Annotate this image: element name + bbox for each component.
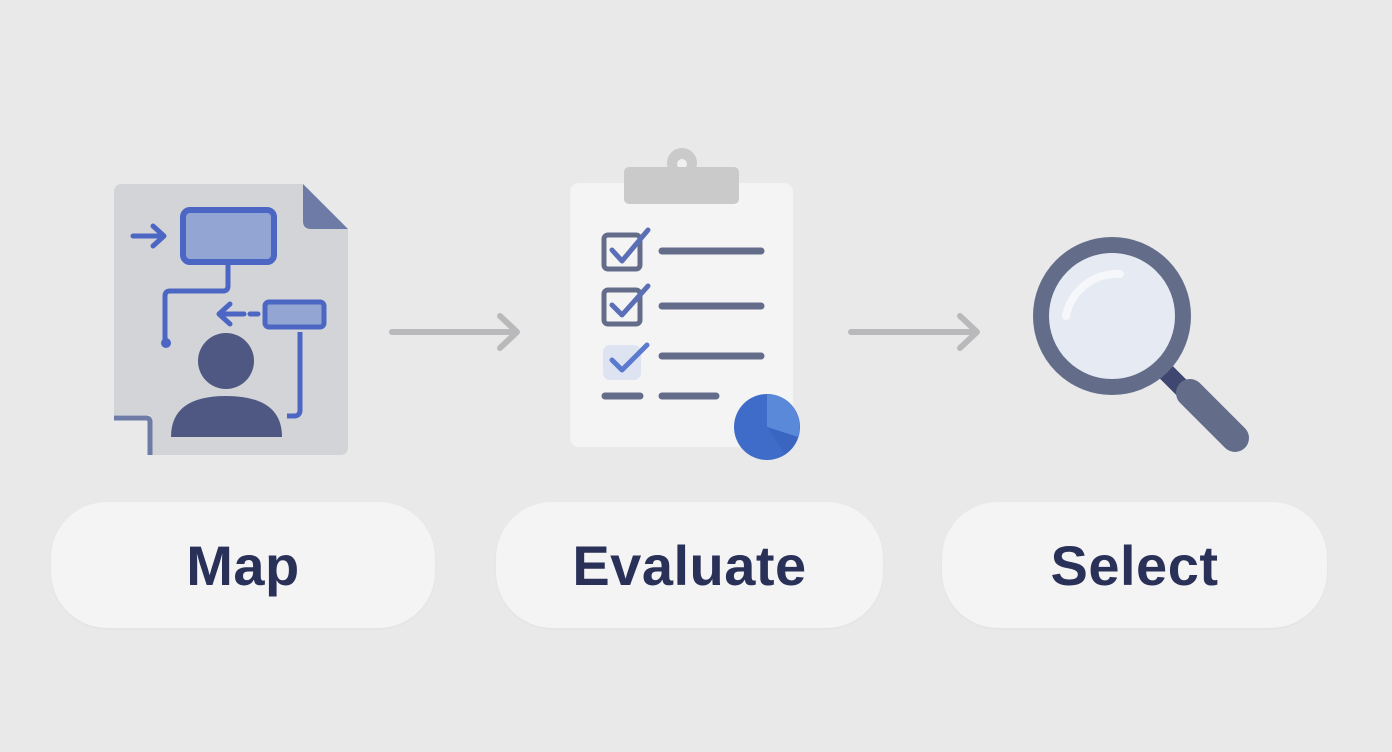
label: Select <box>942 502 1327 628</box>
label: Evaluate <box>496 502 883 628</box>
arrow 1 <box>392 316 517 348</box>
arrow 2 <box>851 316 977 348</box>
label: Select: Select <box>1050 534 1218 596</box>
icon: clipboard checklist <box>570 148 800 460</box>
label: Map <box>51 502 435 628</box>
icon: map document <box>114 184 348 455</box>
label: Evaluate: Evaluate <box>572 534 807 596</box>
icon: magnifying glass <box>1041 245 1235 438</box>
label: Map: Map <box>186 534 300 596</box>
